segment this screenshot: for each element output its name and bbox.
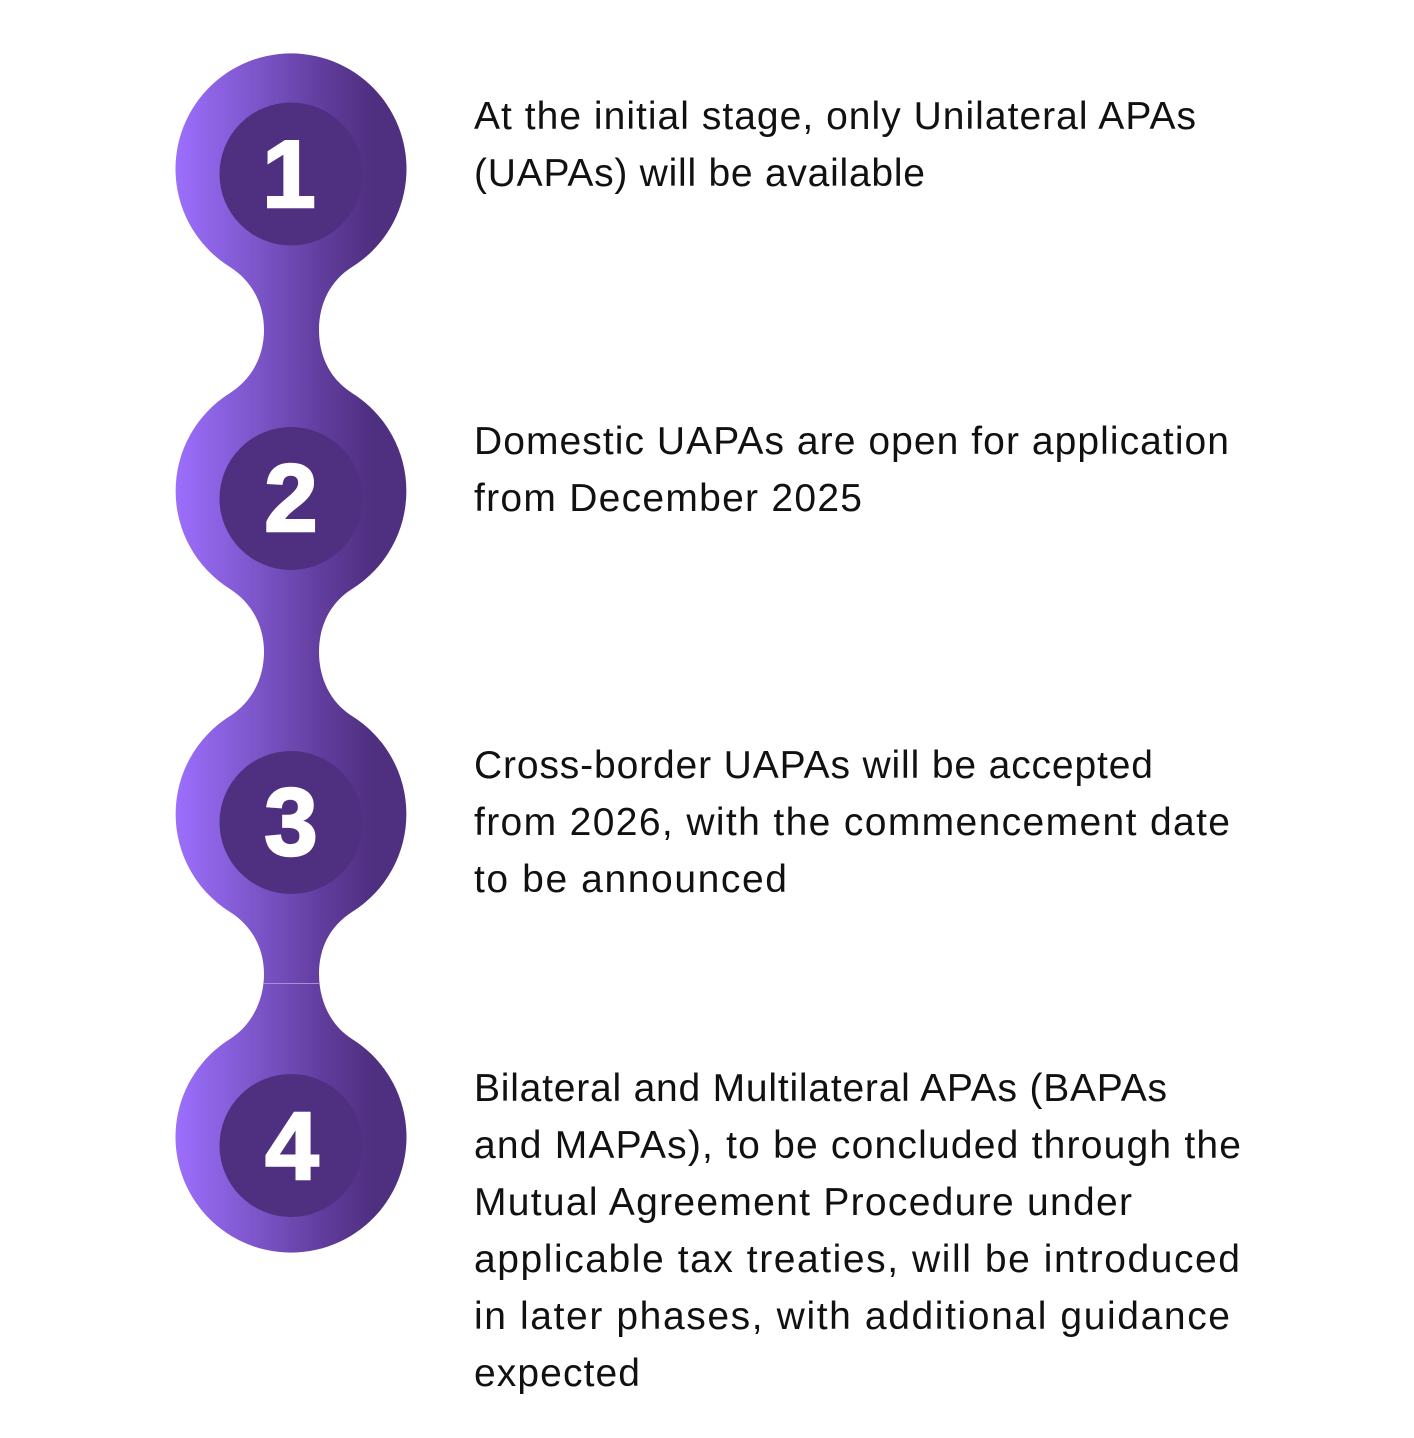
text block: step 2: Domestic UAPAs are open for application (474, 420, 1229, 463)
step 2 badge: 2 (264, 445, 318, 552)
text block: step 4 (474, 1067, 1241, 1395)
text block: step 1 (474, 95, 1196, 195)
text block: step 2: from December 2025 (474, 477, 862, 520)
text block: step 2 (474, 420, 1229, 520)
step 3 badge: 3 (264, 769, 318, 876)
text block: step 4: Mutual Agreement Procedure under (474, 1181, 1132, 1224)
text block: step 3: from 2026, with the commencement date (474, 801, 1230, 844)
text block: step 3: Cross-border UAPAs will be accepted (474, 744, 1153, 787)
timeline: connected purple circles (176, 53, 406, 1253)
connected blob shape (176, 53, 406, 1253)
text block: step 4: expected (474, 1352, 640, 1395)
step 1 badge (220, 102, 362, 246)
text block: step 3: to be announced (474, 858, 787, 901)
step 4 badge (220, 1074, 362, 1217)
text block: step 3 (474, 744, 1230, 901)
text block: step 4: in later phases, with additional guidance (474, 1295, 1230, 1338)
text block: step 4: and MAPAs), to be concluded through the (474, 1124, 1241, 1167)
text block: step 1: At the initial stage, only Unilateral APAs (474, 95, 1196, 138)
text block: step 4: Bilateral and Multilateral APAs (BAPAs (474, 1067, 1167, 1110)
step 2 badge (220, 427, 362, 570)
step 1 badge: 1 (262, 121, 316, 228)
step 3 badge (220, 751, 362, 894)
text block: step 4: applicable tax treaties, will be introduced (474, 1238, 1240, 1281)
step 4 badge: 4 (265, 1093, 319, 1200)
text block: step 1: (UAPAs) will be available (474, 152, 925, 195)
